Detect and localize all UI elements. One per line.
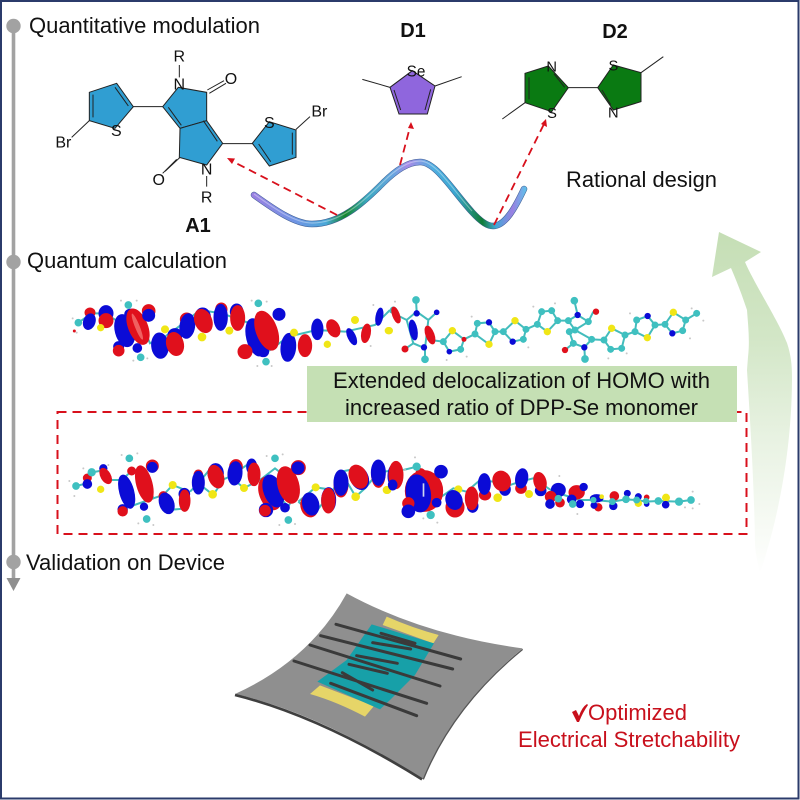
dashed box: high DPP-Se [58, 412, 746, 534]
result: optimized electrical stretchability: Optimized [588, 700, 687, 725]
upward gradient arrow [712, 232, 792, 573]
molecule A1: O [152, 172, 165, 189]
molecule A1 [55, 48, 328, 207]
molecule D2: N [608, 105, 619, 121]
orbital plot: top molecule [72, 297, 704, 367]
heading: quantum calculation: Quantum calculation [27, 248, 227, 273]
molecule D2: S [547, 106, 557, 122]
molecule D2 [502, 57, 663, 122]
orbital lobes left part [68, 452, 400, 526]
device illustration [235, 593, 523, 779]
substrate [235, 593, 523, 779]
gold electrodes [310, 617, 439, 717]
icon: check mark [572, 704, 588, 722]
molecule A1: Br [55, 135, 72, 152]
molecule D1 [362, 64, 462, 114]
orbital lobes left part [72, 300, 396, 367]
heading: validation on device: Validation on Device [26, 550, 225, 575]
orbital plot: bottom molecule [68, 452, 700, 526]
arrow: ribbon to D2 [494, 119, 547, 225]
result: optimized electrical stretchability [518, 700, 740, 752]
molecule A1: N [174, 76, 185, 93]
label D1: D1 [400, 20, 426, 42]
arrow: ribbon to D1 [400, 122, 414, 165]
orbital lobes and atoms right part [385, 297, 704, 363]
molecule A1: O [225, 71, 237, 88]
teal semiconductor film [317, 624, 434, 709]
callout: extended delocalization: Extended delocalization of HOMO with [333, 368, 710, 393]
molecule A1: S [111, 123, 122, 140]
heading: quantitative modulation: Quantitative modulation [29, 13, 260, 38]
molecule D1: Se [407, 64, 425, 81]
callout: extended delocalization [307, 366, 737, 422]
molecule A1: S [264, 115, 275, 132]
molecule A1: Br [311, 103, 328, 120]
arrow: ribbon to A1 [227, 158, 337, 215]
molecule A1: N [201, 161, 212, 178]
label D2: D2 [602, 21, 628, 43]
label: rational design: Rational design [566, 167, 717, 192]
timeline axis [6, 19, 21, 591]
molecule D2: S [608, 59, 618, 75]
callout: extended delocalization: increased ratio of DPP-Se monomer [345, 395, 698, 420]
molecule D2: N [546, 60, 557, 76]
orbital lobes right part [383, 456, 700, 524]
result: optimized electrical stretchability: Electrical Stretchability [518, 727, 740, 752]
molecule A1: R [174, 48, 185, 65]
dark electrode bars [294, 624, 461, 716]
label A1: A1 [185, 215, 211, 237]
polymer ribbon [254, 161, 524, 226]
molecule A1: R [201, 190, 212, 207]
